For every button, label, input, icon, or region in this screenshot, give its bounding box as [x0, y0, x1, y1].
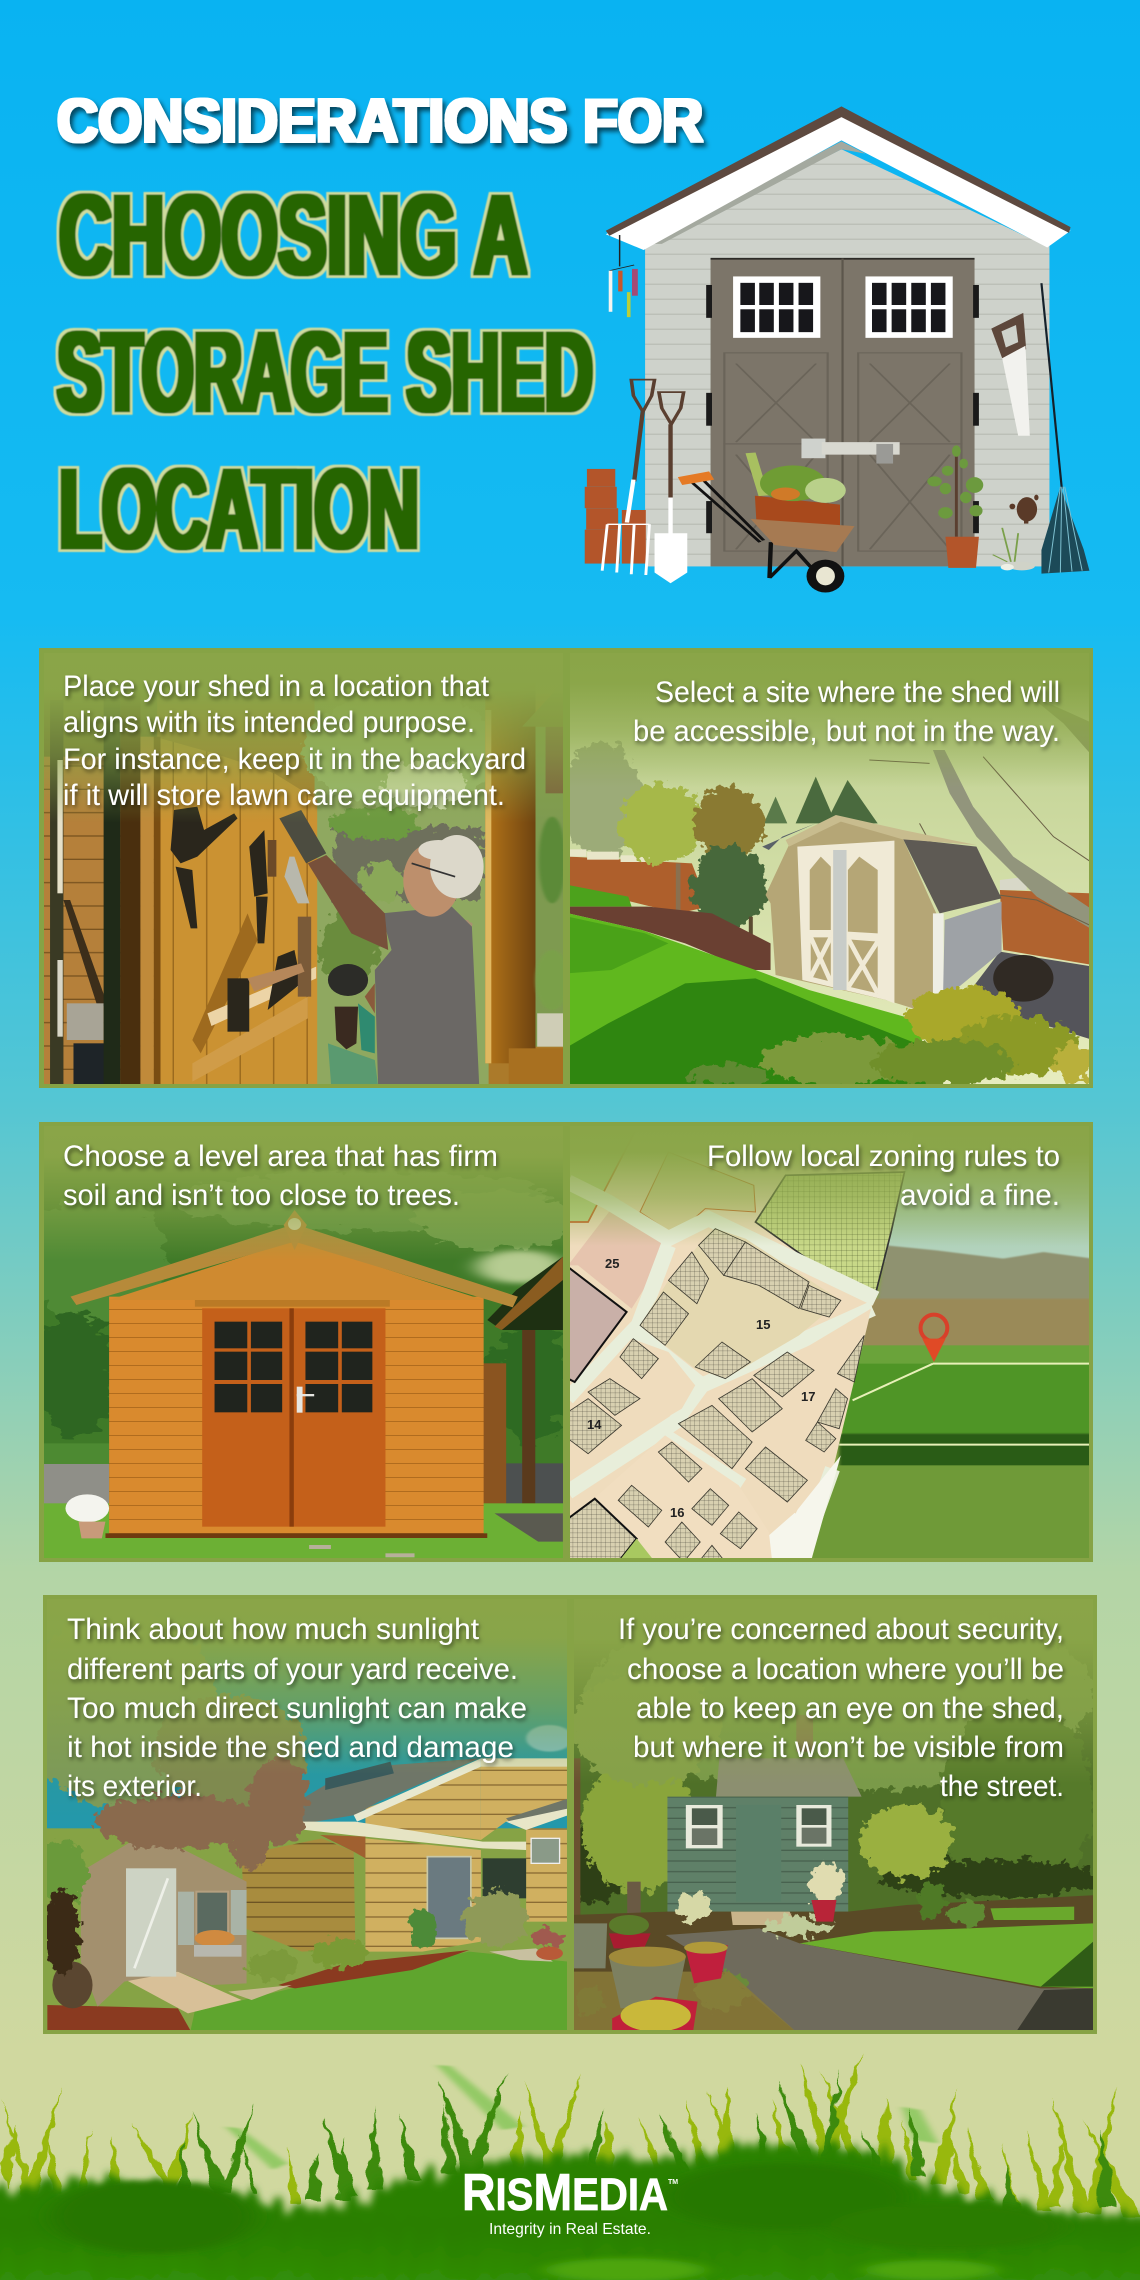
map plot numbers: 17 [801, 1389, 815, 1404]
top colour fade [570, 653, 1089, 788]
potted plant [927, 445, 983, 568]
photo: weathered shed beside yellow house [47, 1652, 567, 2030]
caption: able to keep an eye on the shed, [636, 1692, 1064, 1725]
panel: sunlight (house and shed photo) [47, 1618, 567, 2030]
panel: level area (wooden shed photo) [44, 1144, 563, 1558]
illustration: garden shed with tools [585, 106, 1089, 592]
caption: Place your shed in a location that [63, 670, 490, 703]
title line: location: LOCATION [59, 446, 419, 572]
stones and grass tuft [993, 528, 1035, 570]
panel: place your shed (gardener photo) [40, 650, 569, 1090]
caption [707, 1140, 1060, 1212]
caption: Follow local zoning rules to [707, 1140, 1060, 1173]
map plot numbers: 15 [756, 1317, 770, 1332]
caption: if it will store lawn care equipment. [63, 779, 505, 812]
wheelbarrow [678, 453, 855, 592]
spade [655, 392, 687, 583]
panel row 3 frame [43, 1595, 1097, 2034]
hand saw [991, 313, 1030, 436]
caption [63, 670, 526, 812]
caption: it hot inside the shed and damage [67, 1731, 514, 1764]
title [57, 87, 703, 572]
panel row 2 frame [39, 1122, 1093, 1562]
panel: select a site (barn shed photo) [570, 680, 1089, 1084]
top colour fade [574, 1599, 1093, 1784]
caption [633, 676, 1060, 748]
panel: zoning rules (site plan and field photo) [568, 1122, 1094, 1562]
trademark: TM [668, 2179, 678, 2186]
caption: For instance, keep it in the backyard [63, 743, 526, 776]
logo: RISMedia [462, 2164, 678, 2238]
title line: considerations for: CONSIDERATIONS FOR [57, 87, 703, 156]
title line: choosing a: CHOOSING A [59, 172, 527, 298]
photo: field with location pin [812, 1161, 1089, 1558]
caption: If you’re concerned about security, [618, 1613, 1064, 1646]
site plan map [570, 1158, 906, 1558]
top colour fade [570, 1126, 1089, 1246]
terracotta pots [585, 469, 646, 564]
title line: storage shed: STORAGE SHED [57, 309, 593, 435]
caption [618, 1613, 1064, 1803]
caption: different parts of your yard receive. [67, 1653, 518, 1686]
top colour fade [44, 653, 563, 823]
caption: Too much direct sunlight can make [67, 1692, 527, 1725]
caption [63, 1140, 498, 1212]
shed body [645, 141, 1049, 566]
caption: be accessible, but not in the way. [633, 715, 1060, 748]
caption: aligns with its intended purpose. [63, 706, 475, 739]
caption: soil and isn’t too close to trees. [63, 1179, 460, 1212]
footer grass [0, 2053, 1140, 2280]
panel: security (green shed photo) [574, 1618, 1093, 2030]
pitchfork [602, 380, 655, 575]
roof [606, 106, 1071, 250]
caption: Think about how much sunlight [67, 1613, 480, 1646]
caption: the street. [940, 1770, 1064, 1803]
top colour fade [47, 1599, 567, 1774]
panel row 1 frame [39, 648, 1093, 1088]
map plot numbers: 25 [605, 1256, 619, 1271]
photo: green shed behind garden [574, 1664, 1093, 2030]
map plot numbers: 14 [587, 1417, 602, 1432]
caption: but where it won’t be visible from [633, 1731, 1064, 1764]
mud splat [1009, 495, 1039, 524]
logo wordmark: RISMEDIA [462, 2164, 668, 2222]
photo: gardener at tool wall [44, 699, 563, 1084]
caption: its exterior. [67, 1770, 202, 1803]
caption: Select a site where the shed will [655, 676, 1060, 709]
caption: Choose a level area that has firm [63, 1140, 498, 1173]
caption: avoid a fine. [900, 1179, 1060, 1212]
photo: barn-style shed on lawn [570, 695, 1089, 1084]
caption [67, 1613, 527, 1803]
map plot numbers: 16 [670, 1505, 684, 1520]
photo: wooden shed among trees [44, 1168, 563, 1558]
top colour fade [44, 1126, 563, 1261]
caption: choose a location where you’ll be [627, 1653, 1064, 1686]
hanging spoons mobile [609, 235, 638, 317]
double door [706, 258, 979, 566]
map plot numbers [587, 1256, 815, 1520]
rake [1041, 283, 1089, 574]
tagline: Integrity in Real Estate. [489, 2221, 651, 2238]
